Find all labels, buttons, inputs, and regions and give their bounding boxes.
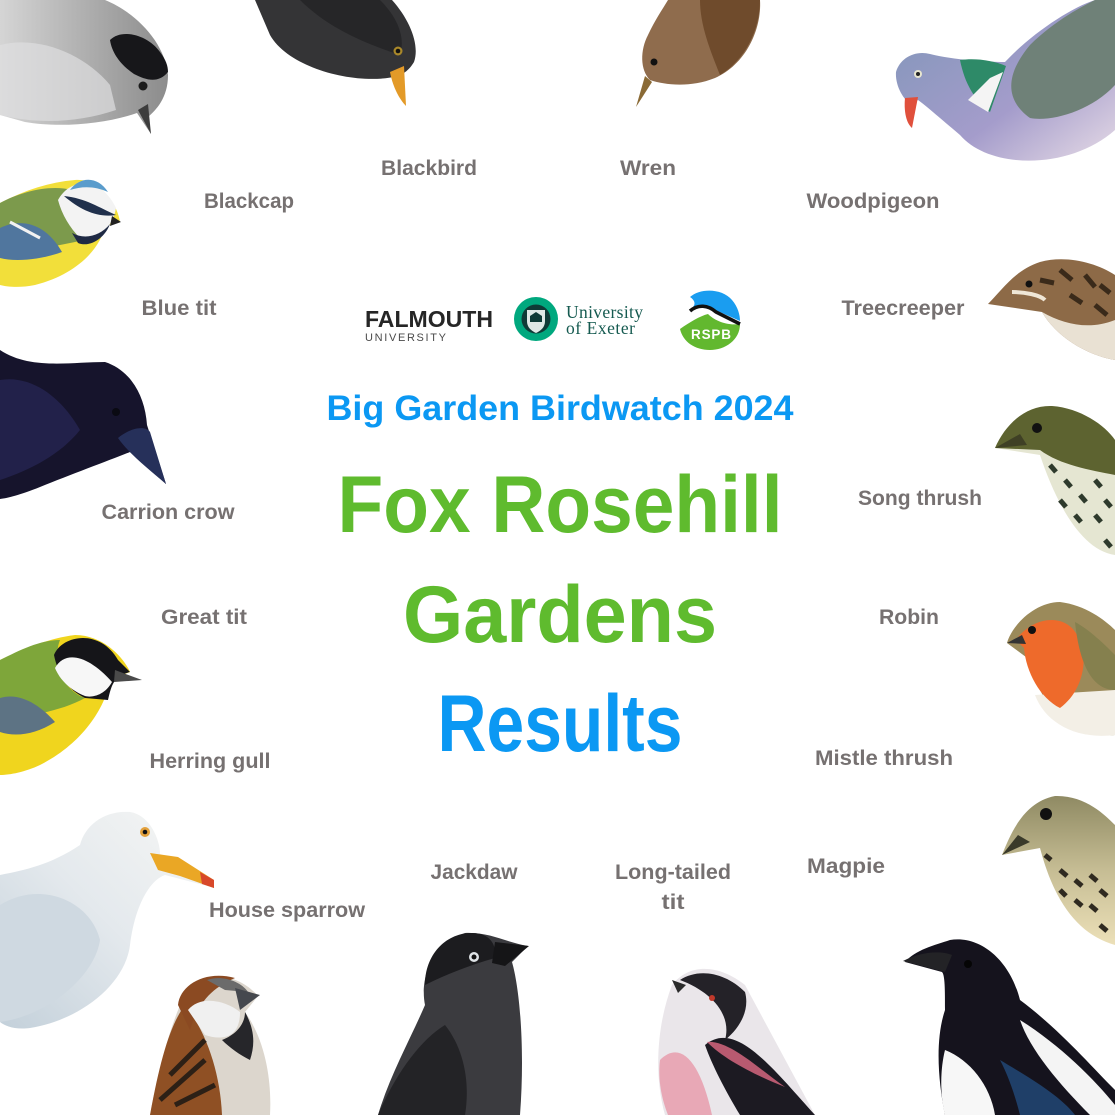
label: Magpie: Magpie	[807, 854, 885, 878]
label: Blackbird: Blackbird	[381, 156, 477, 180]
label: Blue tit: Blue tit	[142, 296, 216, 320]
bird: herring gull	[0, 812, 215, 1029]
title: Gardens: Gardens	[403, 570, 717, 660]
logo: University of Exeter: University	[566, 302, 643, 322]
logo: Falmouth University: FALMOUTH	[365, 306, 493, 332]
label: Wren: Wren	[620, 156, 676, 180]
subtitle: Big Garden Birdwatch 2024	[326, 388, 794, 428]
label: Treecreeper: Treecreeper	[842, 296, 965, 320]
bird: long-tailed tit	[658, 969, 815, 1115]
logo: RSPB: RSPB	[691, 327, 731, 342]
label: Jackdaw: Jackdaw	[430, 860, 518, 884]
logo: University of Exeter: of Exeter	[566, 318, 635, 338]
bird: magpie	[903, 939, 1115, 1115]
label: Robin: Robin	[879, 605, 939, 629]
bird: woodpigeon	[896, 0, 1115, 161]
label: Mistle thrush: Mistle thrush	[815, 746, 953, 770]
bird: wren	[636, 0, 760, 107]
bird: blue tit	[0, 180, 121, 287]
label: Long-tailed tit	[615, 860, 731, 914]
bird: carrion crow	[0, 350, 166, 499]
bird: jackdaw	[378, 933, 529, 1115]
bird: song thrush	[995, 406, 1115, 555]
label: Song thrush: Song thrush	[858, 486, 982, 510]
logo: Falmouth University	[365, 306, 493, 344]
bird: mistle thrush	[1002, 796, 1115, 945]
bird: house sparrow	[150, 976, 270, 1115]
label: Long-tailed tit: tit	[662, 890, 684, 914]
heading: Results: Results	[438, 679, 682, 769]
logo: RSPB	[680, 291, 740, 350]
title: Fox Rosehill: Fox Rosehill	[338, 460, 782, 550]
label: Carrion crow: Carrion crow	[102, 500, 235, 524]
label: House sparrow: House sparrow	[209, 898, 365, 922]
label: Long-tailed tit: Long-tailed	[615, 860, 731, 884]
label: Great tit: Great tit	[161, 605, 247, 629]
logo: Falmouth University: UNIVERSITY	[365, 332, 447, 344]
bird: blackbird	[255, 0, 416, 106]
bird: blackcap	[0, 0, 168, 134]
bird: robin	[1007, 602, 1115, 736]
label: Herring gull: Herring gull	[150, 749, 270, 773]
logo: University of Exeter	[514, 297, 643, 341]
bird: great tit	[0, 635, 142, 775]
label: Woodpigeon: Woodpigeon	[806, 189, 940, 213]
bird: treecreeper	[988, 259, 1115, 360]
label: Blackcap: Blackcap	[204, 189, 294, 213]
